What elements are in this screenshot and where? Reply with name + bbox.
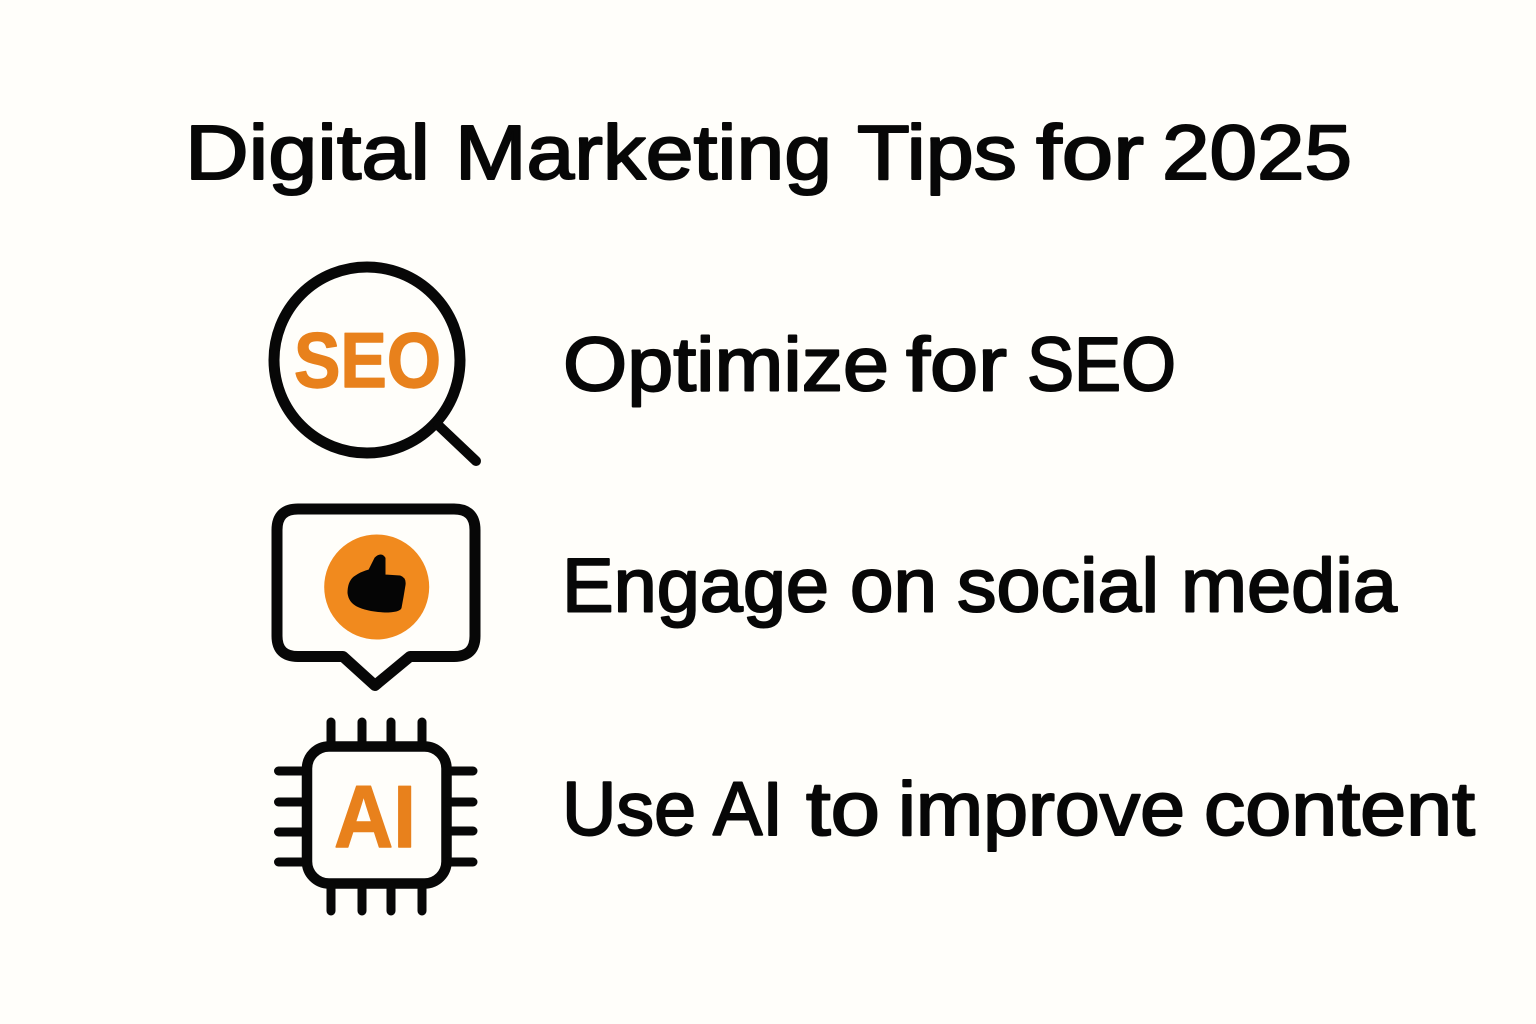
title: 2025	[1162, 110, 1352, 196]
title: Digital	[185, 110, 430, 196]
text: engage on social media	[562, 544, 1398, 628]
text: optimize for SEO: for	[906, 322, 1007, 408]
icon: social media speech bubble	[277, 509, 475, 686]
title: Marketing	[455, 110, 832, 196]
icon: SEO magnifying glass	[274, 267, 476, 461]
text: use AI to improve content: AI	[713, 767, 783, 852]
title: Tips	[857, 110, 1017, 196]
icon: AI chip	[278, 722, 473, 911]
text: optimize for SEO	[563, 322, 1176, 408]
text: engage on social media: social	[957, 544, 1159, 628]
text: use AI to improve content: Use	[562, 767, 696, 852]
text: use AI to improve content: improve	[898, 767, 1185, 852]
text: use AI to improve content	[562, 767, 1475, 852]
text: engage on social media: media	[1181, 544, 1398, 628]
title: for	[1036, 110, 1144, 196]
text: use AI to improve content: to	[806, 767, 880, 852]
icon: SEO magnifying glass: SEO	[294, 316, 441, 404]
title	[185, 110, 1352, 196]
text: engage on social media: Engage	[562, 544, 829, 628]
text: optimize for SEO: Optimize	[563, 322, 889, 408]
text: engage on social media: on	[850, 544, 937, 628]
text: use AI to improve content: content	[1204, 767, 1475, 852]
icon: AI chip: AI	[334, 767, 416, 866]
text: optimize for SEO: SEO	[1027, 322, 1176, 408]
